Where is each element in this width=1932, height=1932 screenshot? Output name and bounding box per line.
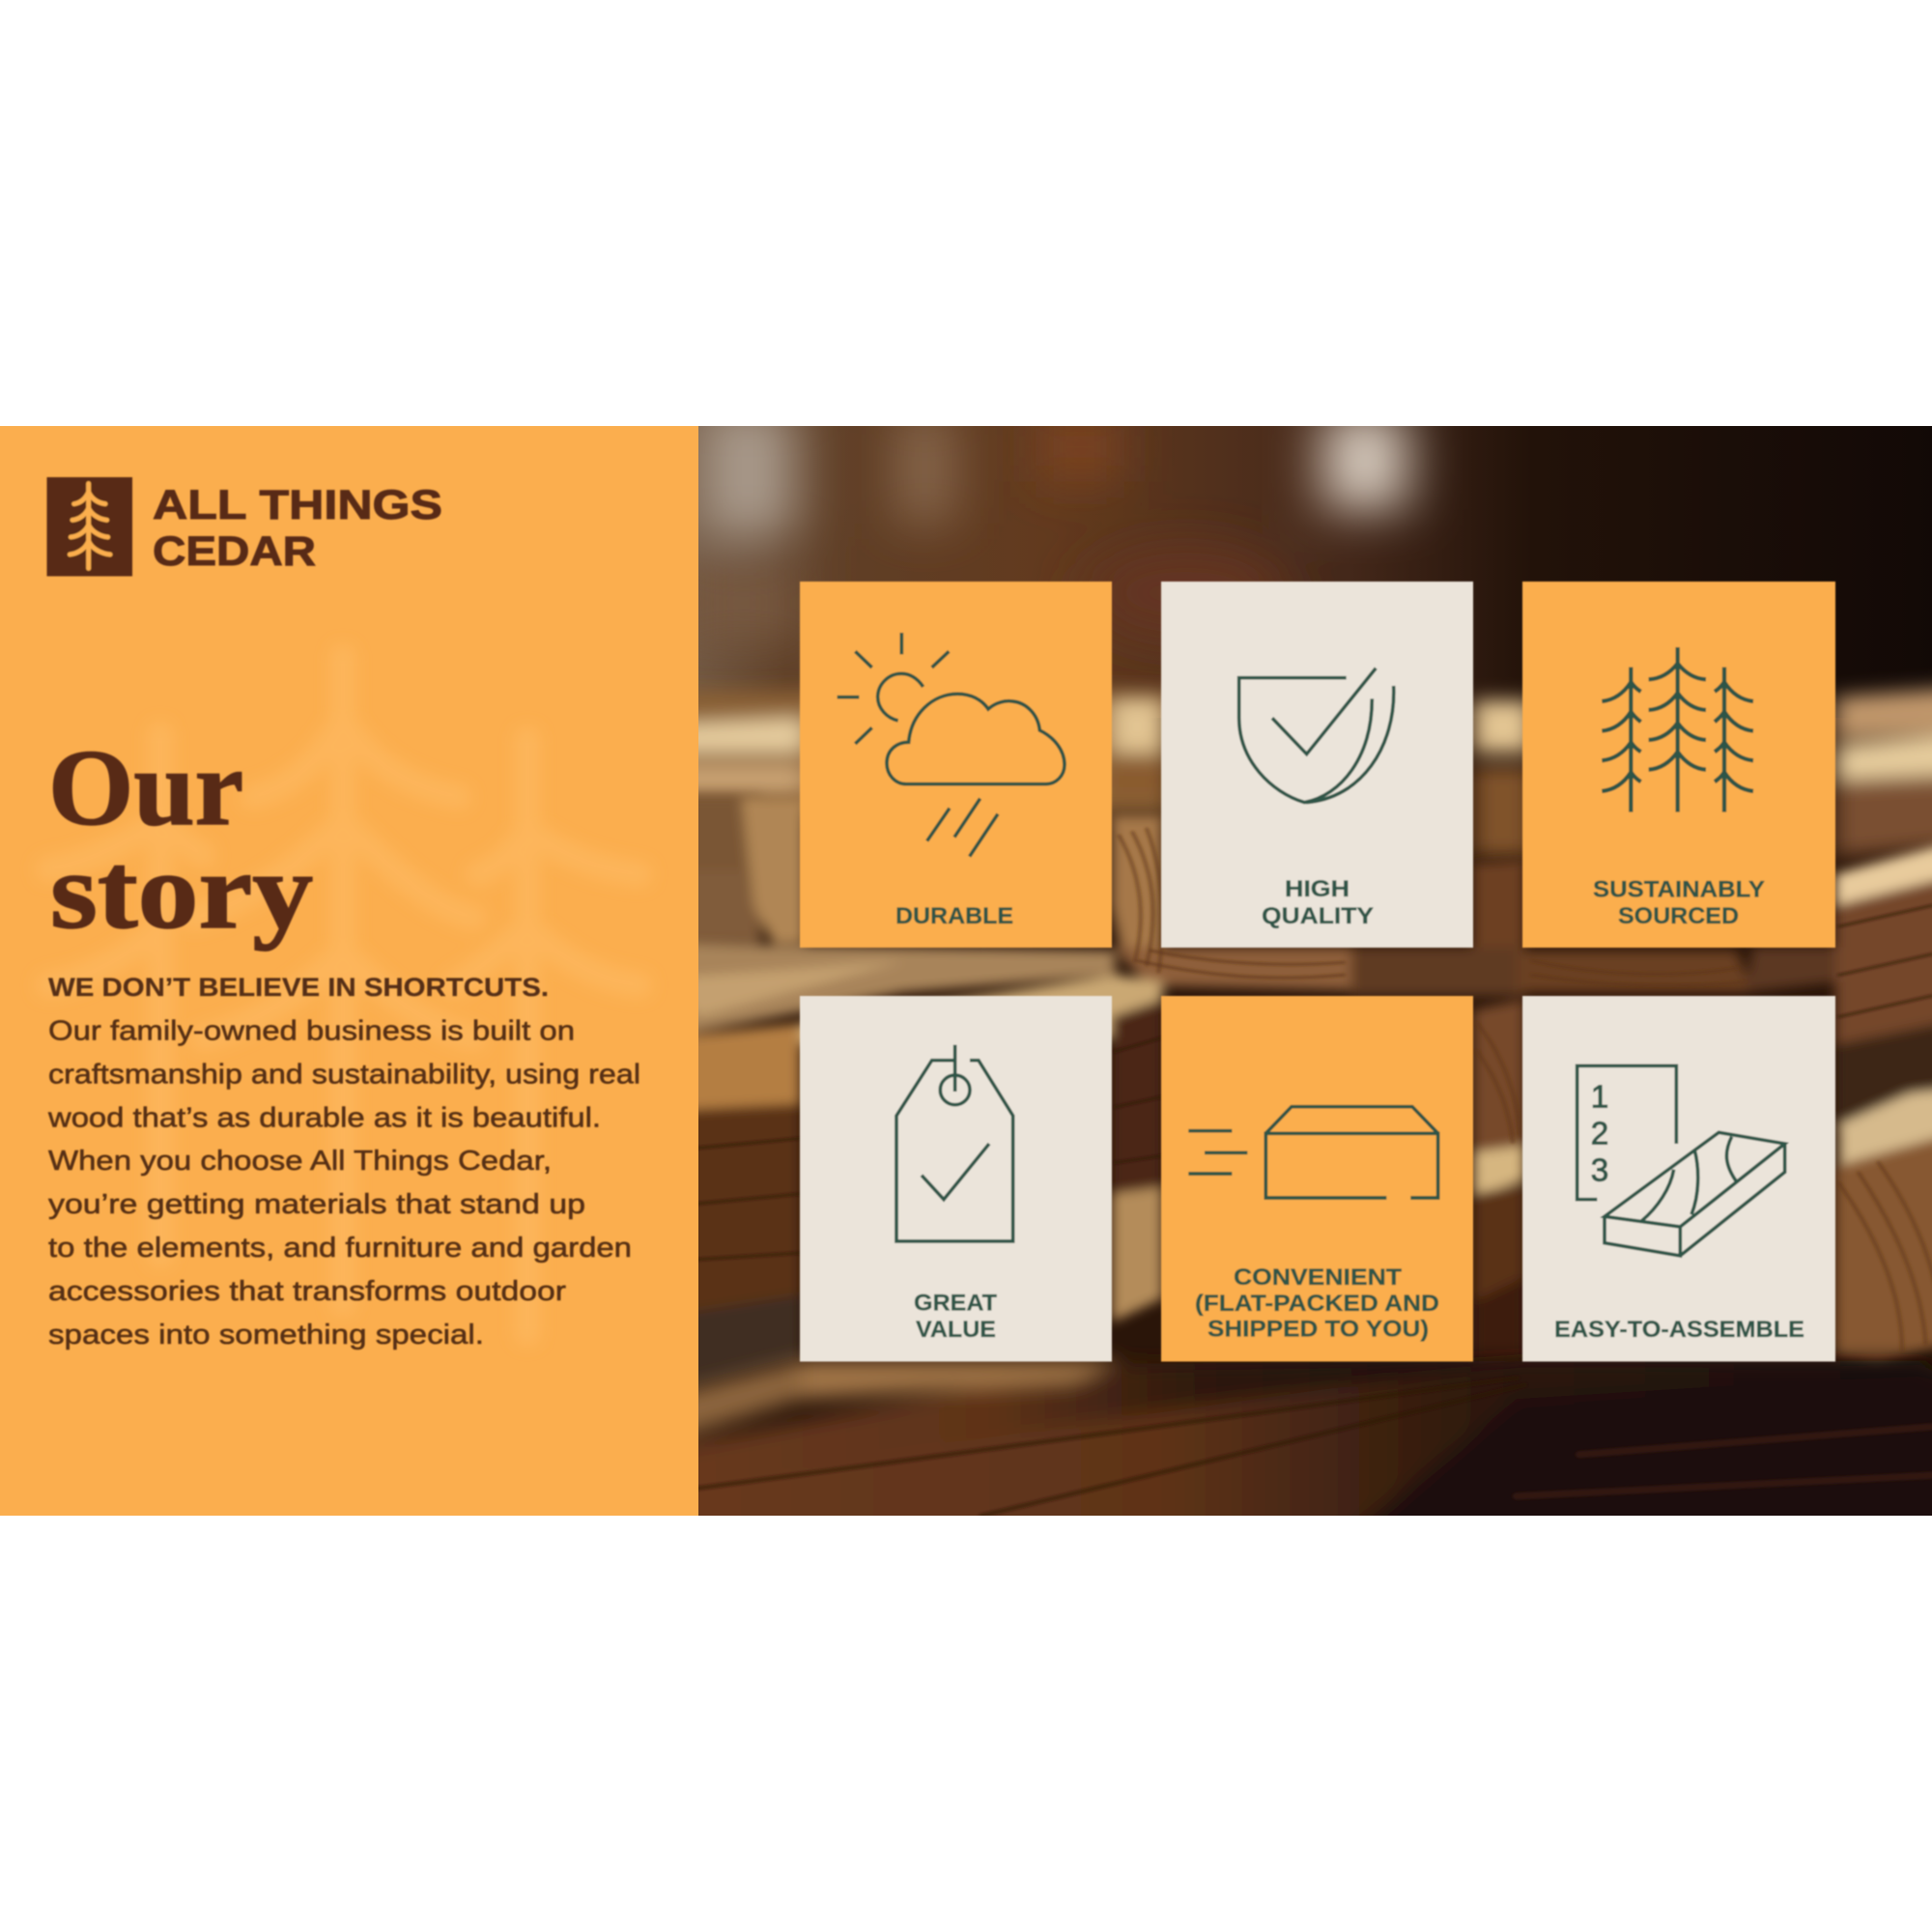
label: durable: DURABLE <box>895 903 1013 929</box>
label: high quality <box>1262 876 1374 929</box>
logo wordmark: ALL THINGS <box>153 482 442 528</box>
text block: story body: accessories that transforms outdoor <box>48 1276 566 1307</box>
text block: story body: spaces into something special. <box>48 1320 484 1350</box>
card: sustainably sourced <box>1522 582 1835 948</box>
card: great value <box>800 996 1112 1362</box>
logo wordmark <box>153 482 442 575</box>
label: great value: VALUE <box>916 1317 996 1343</box>
card: durable <box>800 582 1112 948</box>
text block: story body: craftsmanship and sustainability, using real <box>48 1059 640 1090</box>
panel: wood photo background <box>698 426 1932 1516</box>
text block: story body: to the elements, and furniture and garden <box>48 1233 632 1264</box>
logo <box>46 477 442 576</box>
text block: story body <box>47 973 640 1350</box>
label: great value: GREAT <box>914 1291 997 1316</box>
label: sustainably sourced <box>1593 877 1765 929</box>
text block: story body: you’re getting materials that stand up <box>48 1189 585 1220</box>
logo wordmark: CEDAR <box>153 528 316 575</box>
text block: story body: WE DON’T BELIEVE IN SHORTCUTS. <box>48 973 549 1002</box>
title <box>48 728 313 952</box>
card: easy to assemble <box>1522 996 1835 1362</box>
title: story <box>50 832 313 952</box>
icon: sun behind cloud with rain <box>838 633 1065 857</box>
label: convenient: (FLAT-PACKED AND <box>1195 1291 1439 1317</box>
label: easy to assemble: EASY-TO-ASSEMBLE <box>1554 1317 1804 1343</box>
icon: numbered instructions and wood plank: 3 <box>1591 1152 1608 1188</box>
text block: story body: Our family-owned business is built on <box>48 1016 575 1047</box>
icon: price tag with check <box>896 1045 1013 1241</box>
background tree watermark <box>48 657 639 1333</box>
text block: story body: When you choose All Things Cedar, <box>48 1146 552 1177</box>
label: sustainably sourced: SUSTAINABLY <box>1593 877 1765 902</box>
icon: numbered instructions and wood plank: 1 <box>1591 1080 1608 1116</box>
label: sustainably sourced: SOURCED <box>1618 903 1739 929</box>
logo mark: tree in brown square <box>46 477 132 576</box>
title: Our <box>48 728 243 848</box>
label: convenient: CONVENIENT <box>1234 1264 1402 1291</box>
card: convenient <box>1161 996 1473 1362</box>
icon: shield with check <box>1239 668 1394 803</box>
card: high quality <box>1161 582 1473 948</box>
icon: numbered instructions and wood plank: 2 <box>1591 1116 1608 1151</box>
label: high quality: HIGH <box>1285 876 1350 902</box>
wood grain detail <box>691 829 1932 1516</box>
icon: shipped flat-pack box with speed lines <box>1188 1107 1438 1198</box>
icon: three cedar trees <box>1602 647 1753 812</box>
icon: numbered instructions and wood plank <box>1577 1065 1785 1256</box>
label: convenient <box>1195 1264 1439 1343</box>
label: high quality: QUALITY <box>1262 903 1374 929</box>
panel: orange story panel <box>0 426 698 1516</box>
label: great value <box>914 1291 997 1343</box>
label: convenient: SHIPPED TO YOU) <box>1208 1316 1429 1343</box>
text block: story body: wood that’s as durable as it is beautiful. <box>47 1103 601 1134</box>
